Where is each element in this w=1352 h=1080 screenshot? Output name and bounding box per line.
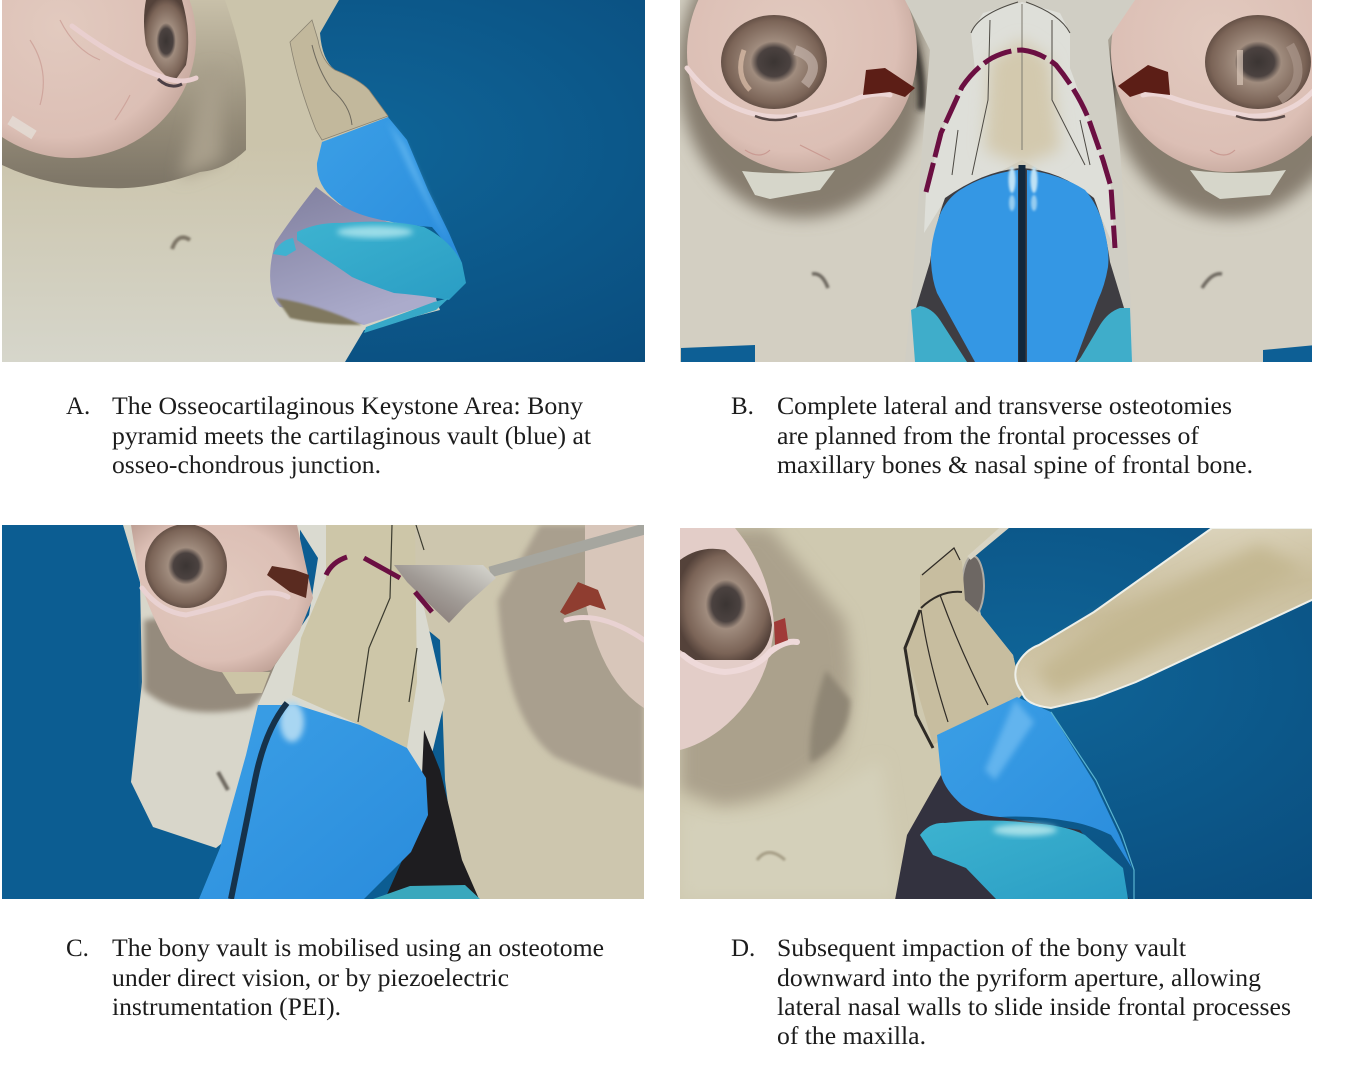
- left eyeball, panel B: [687, 0, 917, 172]
- caption D: of the maxilla.: [777, 1023, 926, 1050]
- socket crease, panel D: [810, 670, 850, 762]
- teal highlight, panel A: [337, 226, 413, 238]
- left nostril dimple, panel B: [812, 274, 828, 288]
- caption A: A.: [66, 393, 90, 420]
- panel C: mobilising the bony vault with osteotome: [2, 524, 648, 899]
- far muscle strand, panel C: [566, 618, 644, 640]
- far eyeball, panel C: [585, 525, 644, 708]
- caption A: The Osseocartilaginous Keystone Area: Bony: [112, 393, 584, 420]
- teal highlight, panel D: [993, 824, 1057, 836]
- near eyeball, panel C: [131, 525, 313, 674]
- left socket rim shadow, panel B: [913, 24, 928, 114]
- caption C: instrumentation (PEI).: [112, 994, 341, 1021]
- nostril dimple, panel C: [218, 772, 228, 790]
- teal alar cartilage, panel D: [920, 820, 1128, 899]
- right nostril dimple, panel B: [1202, 274, 1222, 288]
- iris, panel A: [144, 0, 188, 82]
- blue upper lateral cartilage, panel A: [317, 117, 462, 263]
- caption A: [66, 393, 591, 479]
- near socket shadow, panel C: [144, 600, 290, 712]
- finger, panel D: [1015, 528, 1316, 708]
- muscle stump, panel D: [774, 618, 788, 645]
- eye socket shadow, panel A: [2, 0, 246, 188]
- nasal bone cap, panel D: [905, 548, 1022, 745]
- right side bone, panel C: [300, 525, 644, 899]
- right eye socket, panel B: [1108, 34, 1312, 228]
- lower teal strip, panel A: [364, 298, 449, 333]
- far eye sliver, panel D: [962, 556, 984, 616]
- right blue cartilage, panel B: [1027, 170, 1108, 362]
- near muscle strand, panel C: [142, 588, 288, 615]
- thin right outline of cartilage, panel D: [1051, 712, 1134, 899]
- blue cartilage, panel D: [937, 697, 1132, 868]
- caption A: pyramid meets the cartilaginous vault (blue) at: [112, 423, 591, 450]
- caption D: downward into the pyriform aperture, allowing: [777, 965, 1262, 992]
- iris, panel D: [680, 549, 772, 660]
- nasal bones and wings, panel B: [924, 2, 1115, 250]
- eye muscle strand, panel A: [72, 26, 196, 81]
- lavender inner lining, panel A: [270, 187, 440, 325]
- nasal bone suture, panel A: [312, 45, 352, 125]
- right eyeball, panel B: [1111, 0, 1312, 172]
- right muscle stump, panel B: [1118, 65, 1170, 97]
- right teal alar cartilage, panel B: [1078, 308, 1132, 362]
- finger warm core, panel D: [1035, 545, 1305, 695]
- teal alar cartilage, panel A: [297, 222, 466, 300]
- osteotome handle, panel C: [490, 528, 648, 572]
- central nasal region, panel B: [905, 0, 1135, 162]
- suture lines, panel C: [358, 525, 424, 722]
- caption D: [731, 935, 1291, 1050]
- right orbital floor, panel B: [1190, 170, 1286, 199]
- bone of the face, panel D: [680, 528, 1022, 899]
- lower blue corners, panel B: [681, 345, 1316, 362]
- cartilage highlights, panel B: [1008, 167, 1038, 211]
- caption D: D.: [731, 935, 755, 962]
- eye socket, panel D: [680, 528, 851, 805]
- caption C: [66, 935, 604, 1021]
- dark iris edge, panel A: [158, 79, 182, 86]
- right socket shadow, panel C: [498, 525, 644, 790]
- caption D: lateral nasal walls to slide inside frontal processes: [777, 994, 1291, 1021]
- cartilage highlight, panel A: [391, 129, 442, 229]
- right socket rim shadow, panel B: [1109, 44, 1118, 111]
- central nasal wing white band, panel C: [258, 525, 445, 778]
- nostril shadow, panel A: [276, 298, 362, 325]
- small teal tab, panel A: [273, 238, 296, 256]
- upper bone spike, panel D: [969, 528, 1005, 558]
- caption B: are planned from the frontal processes of: [777, 423, 1200, 450]
- osteotomy dashes, panel C: [326, 557, 432, 612]
- caption B: [731, 393, 1253, 479]
- caption C: C.: [66, 935, 89, 962]
- eyeball veins, panel A: [10, 20, 130, 135]
- left teal alar cartilage, panel B: [911, 306, 967, 362]
- central dark septum line, panel B: [1018, 165, 1026, 362]
- dark gap, panel C: [385, 730, 479, 899]
- muscle strand, panel D: [683, 642, 797, 672]
- eyeball, panel A: [0, 0, 196, 158]
- caption C: under direct vision, or by piezoelectric: [112, 965, 509, 992]
- caption B: maxillary bones & nasal spine of frontal bone.: [777, 452, 1253, 479]
- blue highlight, panel D: [985, 700, 1034, 780]
- nostril dimple, panel A: [172, 237, 190, 249]
- dark inner lining, panel D: [895, 775, 1130, 900]
- lighter lower bone, panel D: [680, 760, 900, 899]
- nasal bone sutures, panel B: [952, 2, 1090, 175]
- bone of the near side, panel C: [123, 525, 300, 848]
- panel D: impaction of the bony vault: [680, 528, 1316, 900]
- left orbital floor, panel B: [742, 170, 835, 199]
- nasal bone sutures, panel D: [905, 548, 988, 748]
- blue cartilage, panel C: [199, 705, 428, 899]
- near muscle stump, panel C: [267, 566, 309, 598]
- caption D: Subsequent impaction of the bony vault: [777, 935, 1186, 962]
- bone of the face, panel A: [2, 0, 440, 362]
- teal tip, panel C: [373, 885, 480, 899]
- near iris, panel C: [145, 524, 227, 608]
- caption B: Complete lateral and transverse osteotomies: [777, 393, 1232, 420]
- nostril dimple, panel D: [757, 852, 785, 860]
- caption C: The bony vault is mobilised using an osteotome: [112, 935, 604, 962]
- left blue cartilage, panel B: [931, 170, 1018, 362]
- nasal bone, panel A: [290, 20, 388, 140]
- left eye socket, panel B: [678, 0, 926, 218]
- caption B: B.: [731, 393, 754, 420]
- socket highlight band, panel A: [178, 98, 226, 179]
- warm centre of nasal bones, panel B: [985, 40, 1060, 165]
- dark shadow beside blue cartilage, panel B: [916, 168, 1124, 362]
- far muscle stump, panel C: [560, 582, 606, 615]
- caption A: osseo-chondrous junction.: [112, 452, 381, 479]
- left muscle stump, panel B: [863, 68, 915, 97]
- planned osteotomy dashed line, panel B: [926, 50, 1115, 248]
- dark slit between cartilages, panel C: [231, 703, 287, 899]
- eyeball, panel D: [680, 528, 774, 750]
- osteotome blade, panel C: [394, 565, 496, 623]
- nasal bone, panel C: [292, 525, 417, 748]
- orbital floor, panel C: [222, 672, 270, 694]
- panel A: side view of keystone area: [0, 0, 645, 362]
- blue highlight, panel C: [280, 702, 304, 742]
- panel B: frontal view with planned osteotomies: [678, 0, 1352, 362]
